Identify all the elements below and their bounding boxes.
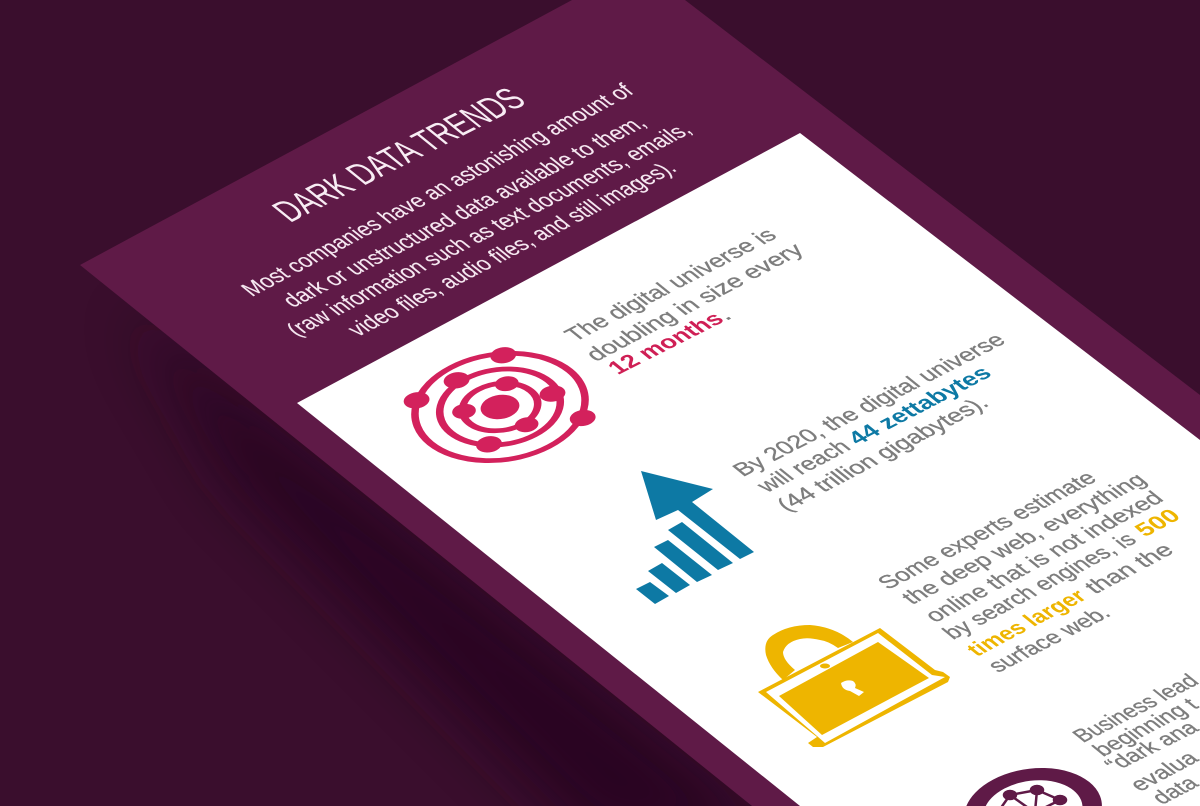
text: deep web 500 times larger: than the [1079, 539, 1179, 598]
icon: atom [382, 331, 618, 483]
text: digital universe doubling: 12 months [601, 307, 730, 378]
text: 44 zettabytes: will reach [750, 435, 856, 497]
panel shadow [130, 310, 790, 806]
text: 44 zettabytes: By 2020, the digital universe [726, 329, 1011, 480]
text: deep web 500 times larger: times larger [961, 585, 1092, 660]
text: 44 zettabytes: (44 trillion gigabytes). [770, 392, 994, 515]
text: deep web 500 times larger: Some experts estimate [871, 467, 1102, 593]
icon: growth arrow [636, 471, 754, 604]
text: 44 zettabytes: 44 zettabytes [841, 362, 997, 449]
intro text [235, 79, 697, 340]
text: deep web 500 times larger: the deep web, everything [895, 469, 1152, 608]
text: deep web 500 times larger: by search engines, is [937, 528, 1142, 643]
text: deep web 500 times larger: surface web. [981, 602, 1116, 676]
text: business leaders [1066, 670, 1200, 806]
text: digital universe doubling: doubling in size every [579, 239, 809, 365]
white content panel [297, 133, 1200, 806]
intro text: dark or unstructured data available to them, [276, 112, 652, 311]
icon: laptop padlock [758, 625, 950, 747]
intro text: video files, audio files, and still images). [341, 157, 682, 340]
intro text: (raw information such as text documents, emails, [280, 118, 697, 340]
icon: network in purple ring [950, 759, 1116, 806]
text: deep web 500 times larger: 500 [1129, 504, 1186, 541]
text: deep web 500 times larger [871, 467, 1186, 676]
text: 44 zettabytes [726, 329, 1011, 515]
text: digital universe doubling: . [709, 304, 737, 324]
text: digital universe doubling: The digital universe is [558, 224, 782, 345]
